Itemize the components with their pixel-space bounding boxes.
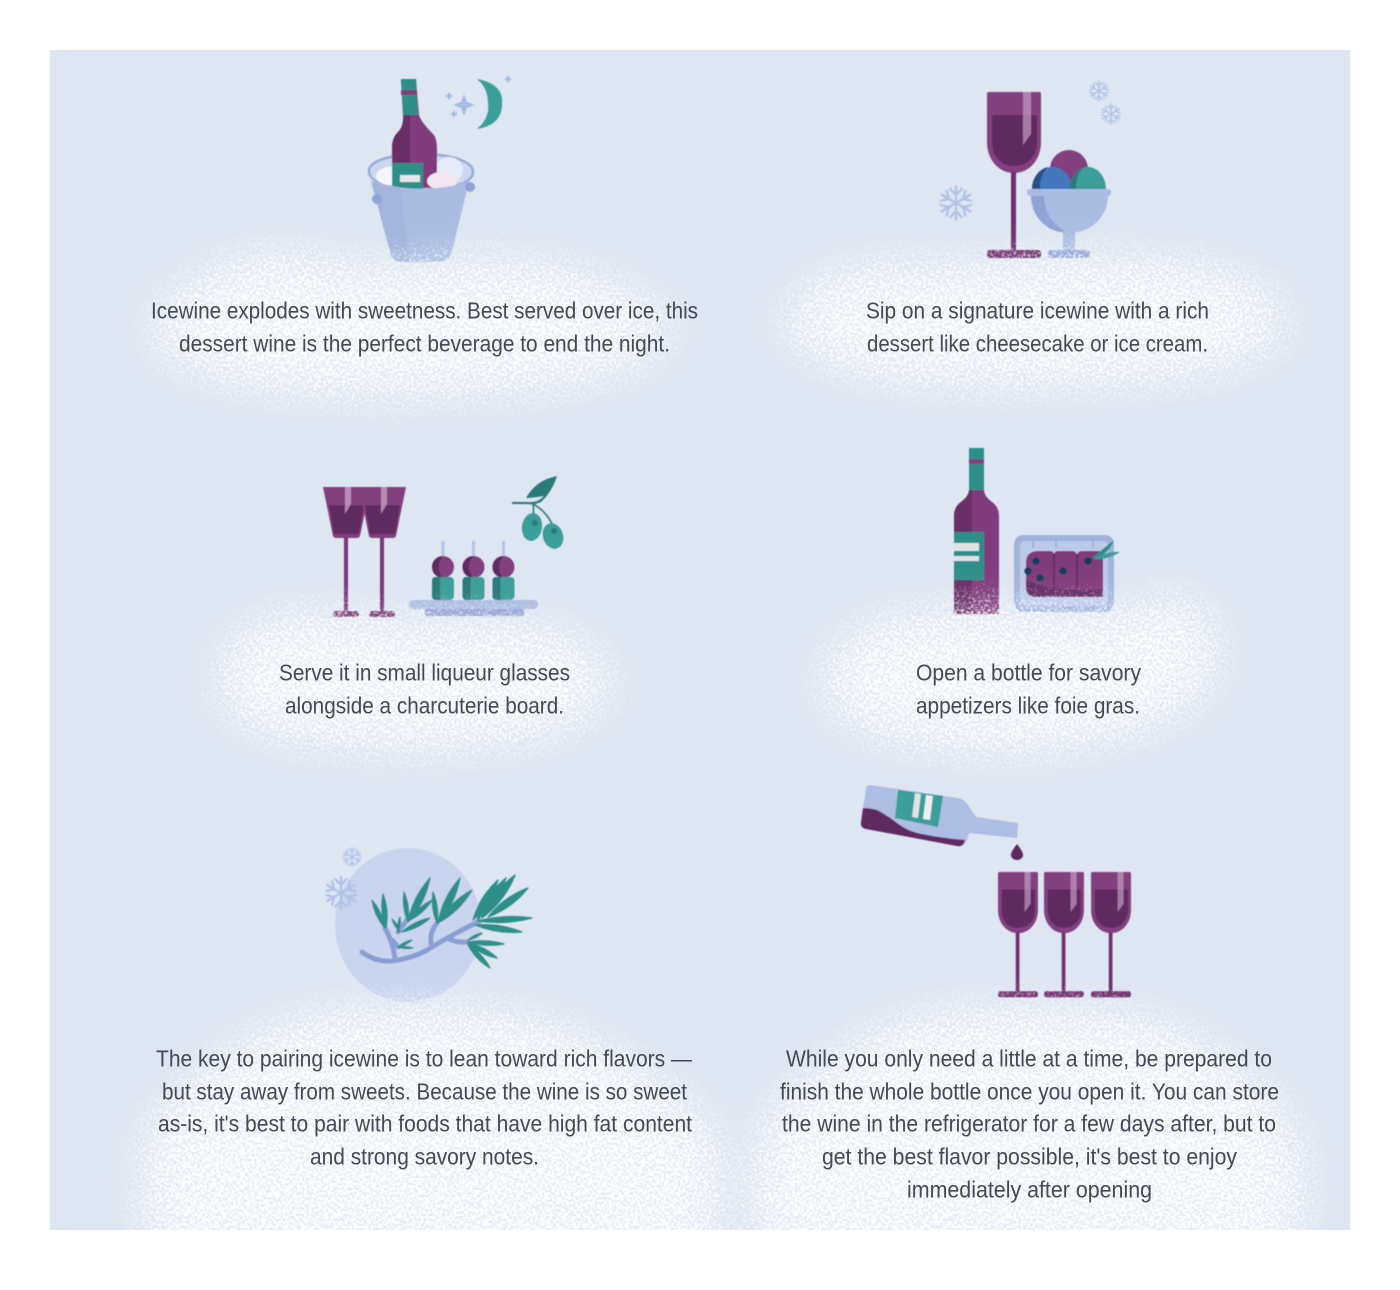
panel: tip 3 liqueur glasses and charcuterie <box>210 476 618 752</box>
text block: immediately after opening <box>907 1176 1152 1202</box>
text block: finish the whole bottle once you open it. You can store <box>780 1078 1279 1104</box>
text block: Serve it in small liqueur glasses <box>279 660 570 686</box>
snow drift <box>750 1006 1305 1260</box>
panel: tip 1 icewine with dessert finish <box>135 75 698 398</box>
text block: Open a bottle for savory <box>916 660 1141 686</box>
snow drift <box>140 1006 725 1260</box>
text block: and strong savory notes. <box>310 1144 539 1170</box>
panel: tip 5 rich flavors <box>140 848 725 1260</box>
text block <box>916 660 1141 718</box>
text block <box>866 298 1209 356</box>
text block: dessert wine is the perfect beverage to end the night. <box>179 330 670 356</box>
snow drift <box>815 585 1222 755</box>
text block: While you only need a little at a time, be prepared to <box>786 1046 1272 1072</box>
text block: appetizers like foie gras. <box>916 692 1140 718</box>
icon: wine bottle and tray of foie gras <box>954 448 1120 614</box>
icon: tilted bottle pouring into three glasses <box>861 785 1131 997</box>
icon: wine glass, ice cream bowl and snowflakes <box>939 81 1121 258</box>
snow drift <box>210 608 618 752</box>
text block <box>279 660 570 718</box>
text block: Icewine explodes with sweetness. Best served over ice, this <box>151 298 698 324</box>
text block: but stay away from sweets. Because the wine is so sweet <box>162 1078 688 1104</box>
text block: the wine in the refrigerator for a few days after, but to <box>782 1110 1276 1136</box>
icon: green sprig over a pale circle with snowflakes <box>324 848 532 1002</box>
text block: The key to pairing icewine is to lean toward rich flavors — <box>156 1046 692 1072</box>
text block <box>156 1046 693 1170</box>
text block: dessert like cheesecake or ice cream. <box>867 330 1208 356</box>
icon: liqueur glasses, appetizer picks and olives <box>323 476 567 617</box>
text block: Sip on a signature icewine with a rich <box>866 298 1209 324</box>
panel: tip 4 savory appetizers <box>815 448 1222 755</box>
text block: alongside a charcuterie board. <box>285 692 564 718</box>
panel: tip 6 finish the bottle <box>750 785 1305 1260</box>
text block <box>151 298 698 356</box>
snow drift <box>135 248 690 398</box>
text block: as-is, it's best to pair with foods that have high fat content <box>158 1110 693 1136</box>
icon: wine bottle in ice bucket under the moon <box>369 75 512 262</box>
snow drift <box>770 256 1300 388</box>
panel: tip 2 rich dessert pairing <box>770 81 1300 388</box>
text block <box>780 1046 1279 1202</box>
text block: get the best flavor possible, it's best to enjoy <box>822 1144 1237 1170</box>
